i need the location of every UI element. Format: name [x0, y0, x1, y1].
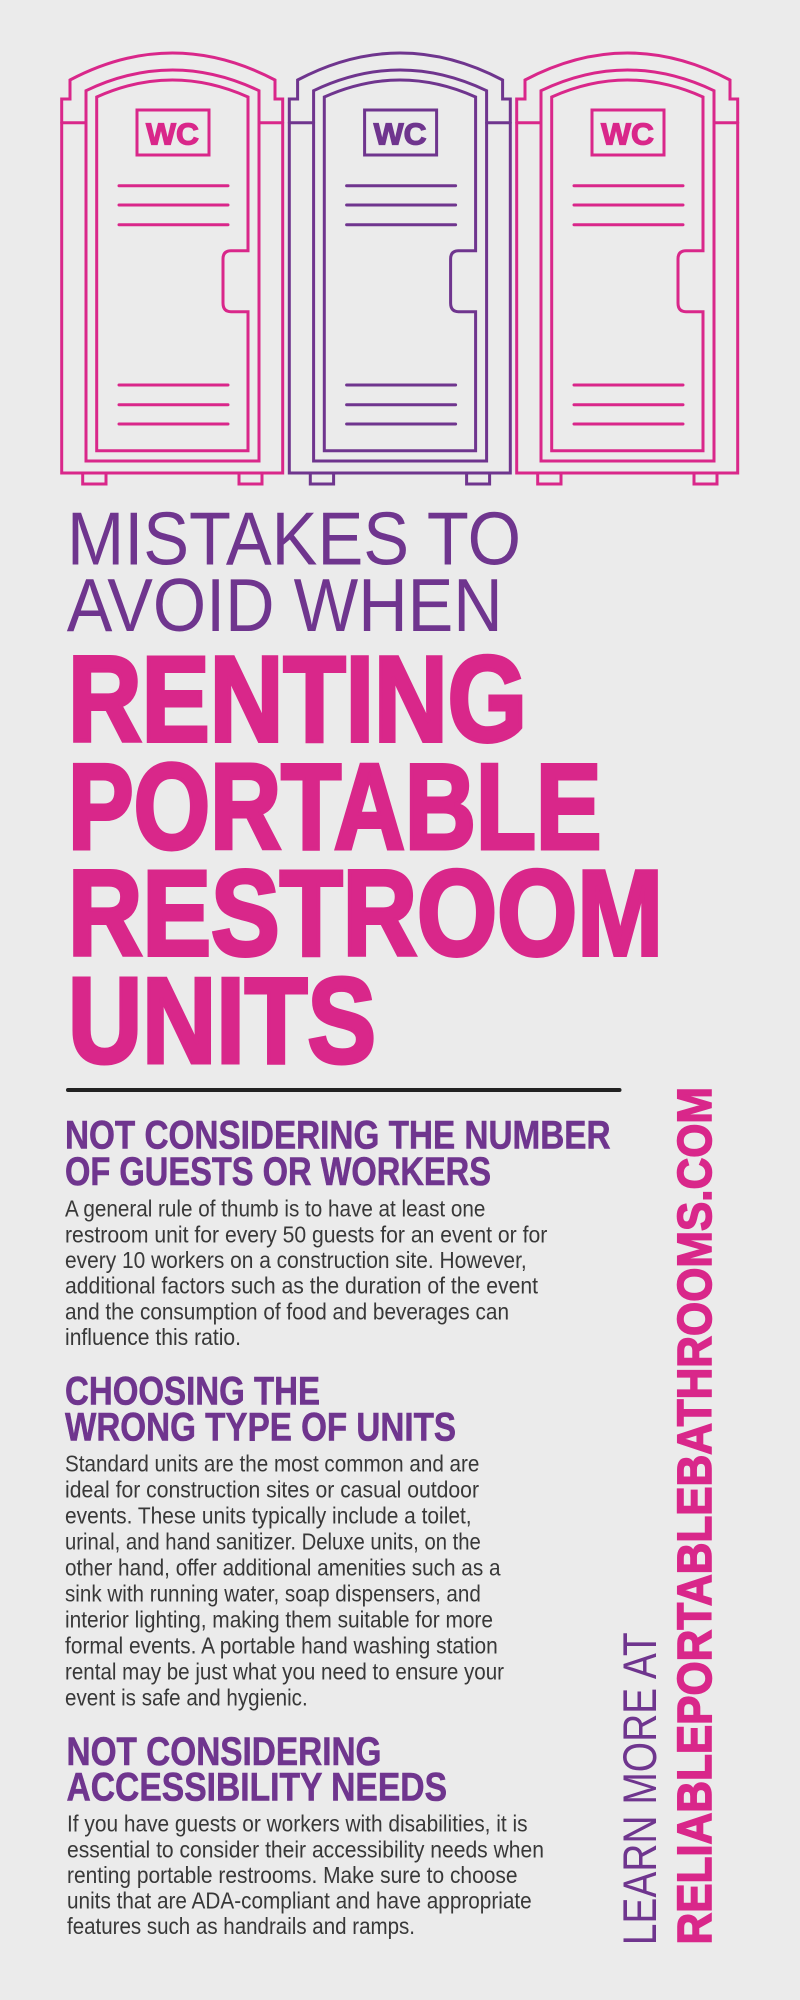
body text: accessibility needs: renting portable restrooms. Make sure to choose [67, 1862, 518, 1888]
section: number of guests [65, 1114, 611, 1350]
body text: wrong type of units: urinal, and hand sanitizer. Deluxe units, on the [65, 1529, 481, 1555]
title: intro lines: AVOID WHEN [67, 563, 503, 647]
heading: accessibility needs: NOT CONSIDERING [66, 1730, 382, 1774]
body text: number of guests: and the consumption of food and beverages can [65, 1298, 509, 1324]
heading: number of guests: NOT CONSIDERING THE NUMBER [65, 1114, 611, 1158]
body text: number of guests: restroom unit for every 50 guests for an event or for [65, 1221, 548, 1247]
heading: wrong type of units: WRONG TYPE OF UNITS [65, 1406, 456, 1450]
body text: wrong type of units: sink with running water, soap dispensers, and [65, 1580, 481, 1606]
body text: number of guests: additional factors such as the duration of the event [65, 1273, 539, 1299]
body text: number of guests: influence this ratio. [65, 1324, 241, 1350]
section: accessibility needs [66, 1730, 544, 1939]
heading: wrong type of units [65, 1369, 456, 1450]
title: intro lines: MISTAKES TO [67, 496, 521, 580]
body text: wrong type of units: Standard units are the most common and are [65, 1451, 479, 1477]
body text: accessibility needs: units that are ADA-compliant and have appropriate [67, 1888, 532, 1914]
body text: wrong type of units: ideal for construction sites or casual outdoor [65, 1477, 479, 1503]
body text: wrong type of units: formal events. A portable hand washing station [65, 1632, 498, 1658]
body text: wrong type of units: interior lighting, making them suitable for more [65, 1606, 493, 1632]
heading: accessibility needs [66, 1730, 447, 1810]
icon: portable restroom purple center: WC [374, 116, 427, 151]
icon: portable restroom pink left: WC [146, 116, 199, 151]
body text: number of guests: every 10 workers on a construction site. However, [65, 1247, 527, 1273]
body text: accessibility needs [67, 1811, 544, 1939]
heading: number of guests [65, 1114, 611, 1194]
icon: portable restroom purple center [289, 53, 510, 484]
title: main heading [68, 631, 663, 1088]
title: main heading: RESTROOM [68, 845, 663, 981]
icon: portable restroom pink left [62, 53, 283, 484]
vertical text: website url: RELIABLEPORTABLEBATHROOMS.COM [668, 1087, 722, 1944]
section: wrong type of units [65, 1369, 504, 1710]
body text: wrong type of units: rental may be just what you need to ensure your [65, 1658, 504, 1684]
body text: wrong type of units [65, 1451, 504, 1710]
title: main heading: PORTABLE [68, 738, 602, 874]
title: intro lines [67, 496, 521, 647]
body text: accessibility needs: essential to consider their accessibility needs when [67, 1836, 544, 1862]
body text: number of guests [65, 1196, 548, 1350]
body text: wrong type of units: events. These units typically include a toilet, [65, 1503, 472, 1529]
body text: number of guests: A general rule of thumb is to have at least one [65, 1196, 485, 1222]
title: main heading: RENTING [68, 631, 527, 767]
heading: wrong type of units: CHOOSING THE [65, 1369, 320, 1413]
body text: accessibility needs: features such as handrails and ramps. [67, 1913, 415, 1939]
icon: portable restroom pink right: WC [601, 116, 654, 151]
heading: number of guests: OF GUESTS OR WORKERS [65, 1150, 491, 1194]
body text: wrong type of units: other hand, offer additional amenities such as a [65, 1554, 501, 1580]
title: main heading: UNITS [68, 952, 376, 1088]
body text: wrong type of units: event is safe and hygienic. [65, 1684, 308, 1710]
vertical text: learn more at: LEARN MORE AT [614, 1632, 667, 1945]
icon: portable restroom pink right [517, 53, 738, 484]
heading: accessibility needs: ACCESSIBILITY NEEDS [66, 1766, 447, 1810]
body text: accessibility needs: If you have guests or workers with disabilities, it is [67, 1811, 528, 1837]
divider rule [68, 1088, 620, 1092]
